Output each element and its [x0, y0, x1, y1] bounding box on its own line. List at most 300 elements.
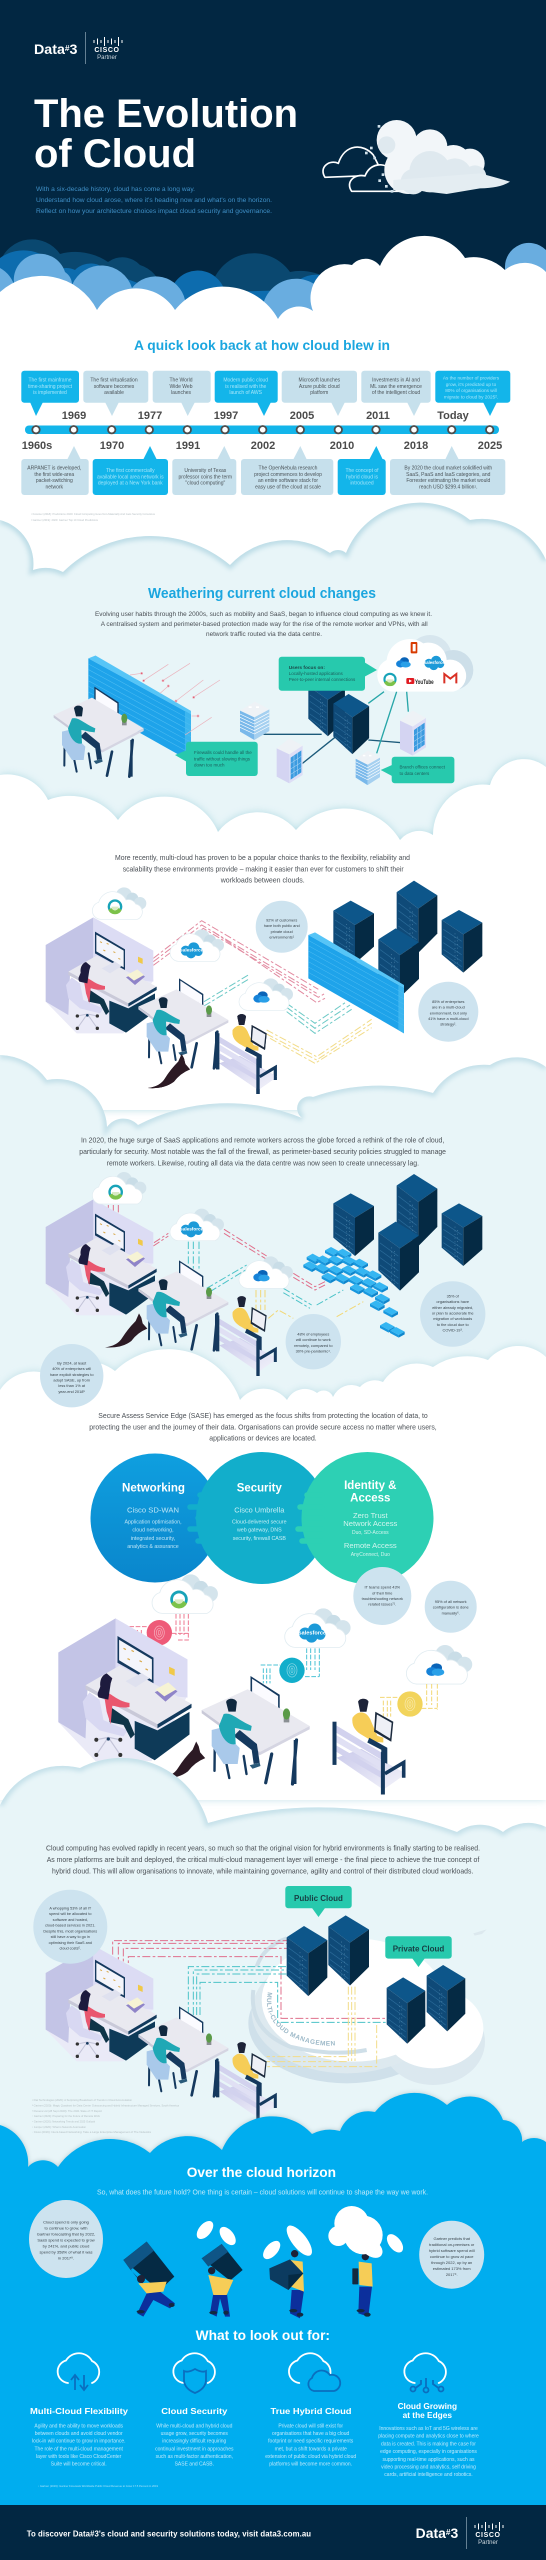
timeline year labels: 2025 — [478, 440, 502, 452]
cloud and fingerprint: onedrive — [380, 1645, 472, 1717]
callout: 1969: ARPANET is developed, — [27, 466, 81, 472]
stat: 35 percent: either already migrated, — [432, 1305, 473, 1310]
woman at cubicle — [46, 917, 157, 1033]
panel: light cloud section 1 — [0, 503, 546, 860]
callout: 1970 — [83, 371, 148, 416]
title: of Cloud — [34, 132, 196, 176]
timeline year labels: 1960s — [22, 440, 52, 452]
feature: multi-cloud flexibility: Suite will become critical. — [51, 2462, 107, 2468]
text block: hybrid cloud: Cloud computing has evolved rapidly in recent years, so much so that the original vision for hybrid environments is finally starting to be realised. — [46, 1844, 480, 1853]
icon: cloud with second cloud — [289, 2353, 340, 2391]
callout: 2025: grow, it's predicted up to — [446, 382, 497, 387]
callout: 1960s — [21, 371, 79, 416]
figure 4 with laptop — [352, 2253, 373, 2317]
stat: 40 percent — [40, 1344, 103, 1407]
text block: SASE: Secure Assess Service Edge (SASE) has emerged as the focus shifts from protecting the location of data, to — [98, 1411, 428, 1420]
feet of figures — [137, 2303, 371, 2317]
feature: true hybrid cloud: platforms will become more common. — [269, 2462, 352, 2468]
callout: 1977: The first commercially — [106, 468, 155, 474]
footer logo: Data — [416, 2526, 445, 2541]
cloud and fingerprint: salesforce — [261, 1608, 351, 1683]
stat: 43 percent: troubleshooting network — [362, 1596, 403, 1601]
section footnotes: ² Gartner (2020): Magic Quadrant for Data Center Outsourcing and Hybrid Infrastructure Managed Services, South America — [32, 2104, 180, 2108]
callout: branch offices — [381, 757, 454, 783]
stat: 95 percent: manually⁶. — [442, 1610, 460, 1615]
feature: multi-cloud flexibility — [30, 2353, 128, 2468]
venn: SASE pillars — [90, 1452, 434, 1584]
man on bench — [216, 1014, 277, 1094]
section footnotes — [32, 2099, 180, 2134]
timeline year labels: 2010 — [330, 440, 354, 452]
feature: true hybrid cloud: extension of public cloud via hybrid cloud — [265, 2454, 356, 2460]
title: The Evolution — [34, 92, 298, 136]
woman at cubicle — [58, 1618, 191, 1761]
timeline year labels: 1977 — [138, 410, 162, 422]
stat: 53 percent — [33, 1890, 107, 1964]
stat: 35 percent: COVID-19³. — [443, 1328, 463, 1332]
feature: cloud security: While multi-cloud and hybrid cloud — [156, 2423, 233, 2429]
section footnotes: ⁴ Gartner (2020): Preparing for the Future of Remote Work — [32, 2114, 101, 2118]
woman at cubicle — [46, 1199, 157, 1315]
callout: users focus on: Users focus on: — [289, 665, 325, 671]
feature: cloud growing at the edges: data is created. This is making the case for — [381, 2441, 476, 2447]
heading: what to look out for: What to look out for: — [196, 2328, 330, 2343]
text block: weathering intro: network traffic routed via the data centre. — [206, 631, 322, 638]
timeline year labels: Today — [437, 410, 470, 422]
callout: 2018: of the intelligent cloud — [372, 390, 420, 396]
dog — [105, 1313, 147, 1348]
callout: 1991 — [153, 371, 211, 416]
text block: 2020 — [79, 1136, 446, 1167]
callout: firewalls: down too much — [194, 763, 225, 768]
callout: 1969 — [21, 446, 89, 495]
feature: cloud growing at the edges: video processing and analytics, self driving — [381, 2464, 476, 2470]
callout: 1960s: time-sharing project — [28, 384, 73, 390]
stat: software spend: traditional on-premises or — [429, 2242, 475, 2247]
timeline year labels: 2005 — [290, 410, 314, 422]
callout: 2005: The OpenNebula research — [259, 466, 318, 472]
section footnotes: ³ Flexera Ltd (28 Sept 2020): The 2021 State of IT Report — [32, 2110, 102, 2113]
management cloud platform — [248, 1929, 487, 2085]
intro text: With a six-decade history, cloud has come a long way. — [36, 186, 195, 193]
icon: cloud with shield — [173, 2353, 215, 2393]
callout: 2010: Azure public cloud — [299, 384, 340, 390]
logo: Data#3 and Cisco Partner: # — [65, 44, 70, 53]
feature: cloud security — [155, 2353, 234, 2468]
circle: Identity and Access: AnyConnect, Duo — [351, 1552, 390, 1558]
figure 1 carrying rack — [123, 2242, 175, 2317]
man on bench — [216, 2042, 277, 2122]
feature: cloud growing at the edges — [378, 2353, 479, 2478]
callout: Public Cloud — [285, 1886, 352, 1917]
callout: 2011: The concept of — [345, 468, 379, 474]
firewall wall — [88, 656, 191, 762]
feature: cloud security: usage grow, security becomes — [161, 2431, 228, 2437]
header cloud band — [0, 236, 546, 322]
cloud: salesforce — [170, 929, 224, 961]
callout: 1960s: is implemented — [33, 390, 67, 396]
callout: 2005: easy use of the cloud at scale — [255, 484, 321, 490]
logo: Data#3 and Cisco Partner: CISCO — [94, 47, 120, 54]
stat: 53 percent: Despite this, most organisations — [43, 1929, 97, 1933]
small clouds carried — [194, 2206, 406, 2262]
callout: 1970: The first virtualisation — [90, 378, 138, 384]
server racks — [308, 677, 345, 736]
callout: 2011: introduced — [350, 481, 374, 487]
callout: Today: By 2020 the cloud market solidified with — [404, 466, 492, 472]
firewall — [308, 932, 404, 1033]
panel: blue horizon section — [0, 2093, 546, 2505]
text block: 2020: In 2020, the huge surge of SaaS applications and remote workers across the globe forced a rethink of the role of cloud, — [81, 1136, 444, 1145]
circle: Security: web gateway, DNS — [237, 1528, 282, 1534]
timeline year labels: 1970 — [100, 440, 124, 452]
text block: multi-cloud — [115, 853, 410, 885]
callout: 1960s: The first mainframe — [28, 378, 72, 384]
stat: 35 percent: migration of workloads — [433, 1316, 472, 1321]
timeline year labels: 2011 — [366, 410, 390, 422]
network lines — [263, 734, 402, 764]
callout: firewalls: Firewalls could handle all the — [194, 750, 252, 755]
circle: Identity and Access — [298, 1452, 434, 1584]
callout: 1991: The World — [170, 378, 193, 384]
circle: Identity and Access: Zero Trust — [353, 1511, 388, 1520]
callout: 1997: professor coins the term — [178, 474, 232, 480]
callout: users focus on: Peer-to-peer internal connections — [289, 677, 356, 682]
illustration: SASE era broken firewall — [46, 1172, 482, 1376]
feature: cloud growing at the edges: Innovations such as IoT and 5G wireless are — [379, 2426, 478, 2432]
worker at desk — [54, 687, 144, 777]
feature: true hybrid cloud — [265, 2353, 356, 2468]
callout: branch offices: Branch offices connect — [400, 764, 446, 770]
footer logo: 3 — [450, 2526, 459, 2541]
dog — [148, 1054, 190, 1088]
stat: 35 percent: organisations have — [436, 1299, 469, 1304]
logo: Data#3 and Cisco Partner: 3 — [70, 42, 78, 57]
callout: 1991: launches — [171, 390, 192, 396]
callout: 1977 — [93, 446, 168, 495]
callout: 1997 — [172, 446, 236, 495]
text block: 2020: remote workers. Likewise, routing all data via the data centre was now seen to create unnecessary lag. — [107, 1158, 419, 1167]
callout: Today: Forrester estimating the market would — [406, 478, 490, 484]
timeline year labels: 1997 — [214, 410, 238, 422]
callout: branch offices: to data centers — [400, 771, 430, 776]
stat: cloud spend — [29, 2200, 103, 2278]
callout: Today: reach USD $299.4 billion¹. — [419, 484, 477, 490]
panel: light cloud section 3 — [0, 1055, 546, 1420]
feature: cloud growing at the edges: placing compute and analytics close to where — [378, 2434, 479, 2440]
timeline year labels — [22, 410, 502, 452]
feature: true hybrid cloud: True Hybrid Cloud — [270, 2406, 352, 2416]
feature: multi-cloud flexibility: Multi-Cloud Flexibility — [30, 2406, 128, 2416]
callout: 1977: deployed at a New York bank — [98, 481, 163, 487]
man at desk — [138, 978, 228, 1068]
callout: 2002: launch of AWS — [229, 390, 263, 396]
stat: 48 percent — [286, 1314, 341, 1369]
timeline year labels: 2018 — [404, 440, 428, 452]
feature: cloud security: Cloud Security — [161, 2406, 228, 2416]
stat: 92 percent — [256, 901, 308, 953]
footer logo: # — [446, 2528, 451, 2537]
text block: multi-cloud: More recently, multi-cloud has proven to be a popular choice thanks to the flexibility, reliability and — [115, 853, 410, 862]
stat: 43 percent: related issues⁷¹. — [368, 1602, 396, 1607]
stat: 85 percent: strategy². — [440, 1022, 456, 1027]
stat: cloud spend: SaaS spend is expected to grow — [37, 2238, 95, 2242]
section footnotes: ⁶ Juniper (2020): What is Network Automation — [32, 2125, 87, 2129]
call to action: To discover Data#3's cloud and security solutions today, visit data3.com.au — [27, 2530, 311, 2539]
circle: Security: Cloud-delivered secure — [232, 1520, 287, 1526]
footer logo: CISCO — [475, 2532, 501, 2539]
stat: 40 percent: adopt SASE, up from — [53, 1378, 90, 1382]
intro text: Reflect on how your architecture choices impact cloud security and governance. — [36, 208, 272, 215]
callout: 2010: Microsoft launches — [298, 378, 341, 384]
feature: cloud growing at the edges: cards, artificial intelligence and robotics. — [384, 2472, 473, 2478]
callout: 2005 — [241, 446, 333, 495]
stat: 40 percent: have explicit strategies to — [50, 1372, 94, 1377]
footer logo: Partner — [478, 2540, 498, 2546]
callout: 2018: ML saw the emergence — [370, 384, 422, 390]
feature: true hybrid cloud: met, but a shift towards a private — [275, 2446, 347, 2452]
callout: 2002: Modern public cloud — [223, 378, 268, 384]
stat: 48 percent: 30% pre-pandemic⁴. — [296, 1348, 331, 1354]
cloud and fingerprint: webex — [129, 1574, 218, 1653]
callout: firewalls: traffic without slowing things — [194, 756, 251, 761]
callout: 1997: University of Texas — [184, 468, 227, 474]
callout: 2002: is realised with the — [225, 384, 266, 390]
cloud: webex — [92, 1172, 146, 1204]
section footnotes: ⁵ Gartner (2020): Networking Trends and 2025 Outlook — [32, 2120, 96, 2124]
callout: 2025: As the number of providers — [443, 376, 500, 380]
figure 2 carrying rack — [202, 2244, 243, 2317]
stat: 85 percent: are in a multi-cloud — [432, 1005, 465, 1010]
timeline footnotes: ² Gartner (2019): 2020: Gartner Top 10 Cloud Predictions — [31, 519, 99, 522]
stat: 48 percent: remotely, compared to — [294, 1343, 333, 1348]
callout: 1969: network — [46, 484, 64, 490]
text block: hybrid cloud: hybrid cloud. This will allow organisations to innovate, while maintaining governance, agility and control of their distributed cloud workloads. — [52, 1866, 473, 1875]
callout: Today — [390, 446, 505, 495]
callout: 1970: available — [104, 390, 124, 396]
text block: weathering intro — [95, 611, 432, 638]
circle: Identity and Access: Remote Access — [344, 1541, 397, 1550]
circle: Security: Cisco Umbrella — [234, 1506, 285, 1515]
text: horizon intro: So, what does the future hold? One thing is certain – cloud solutions will continue to shape the way we work. — [97, 2188, 428, 2197]
stat: 48 percent: will continue to work — [296, 1337, 331, 1342]
panel: white cloud section 2 — [0, 759, 546, 1110]
stat: 43 percent — [353, 1567, 411, 1625]
icon: outlined and fluffy cloud — [323, 120, 510, 194]
stat: 53 percent: software and hosted, — [53, 1918, 88, 1922]
callout: Private Cloud — [385, 1936, 452, 1967]
man at desk — [202, 1676, 310, 1784]
woman at cubicle — [46, 1945, 157, 2061]
illustration: people carrying servers and clouds — [123, 2206, 406, 2318]
bench and desk feet overlapping section 3 edge — [148, 1014, 277, 1094]
callout: Today: SaaS, PaaS and IaaS categories, and — [406, 472, 491, 478]
feature: multi-cloud flexibility: lock-in will continue to grow in importance. — [32, 2439, 126, 2445]
server racks — [333, 881, 482, 997]
callout: users focus on — [279, 657, 377, 691]
timeline footnotes — [31, 513, 156, 522]
stat: 53 percent: A whopping 53% of all IT — [49, 1906, 92, 1910]
feature: cloud security: continual investment in approaches — [155, 2446, 234, 2452]
data paths — [153, 921, 372, 1063]
panel: light cloud section 5 — [0, 1758, 546, 2200]
stat: 95 percent — [425, 1581, 477, 1633]
feature: multi-cloud flexibility: layer with tools like Cisco CloudCenter — [36, 2454, 122, 2460]
section footnotes: ¹ Flat Technologies (2020): A Surprising Breakdown of Trends in Cloud Accumulation — [32, 2099, 133, 2102]
timeline year labels: 1991 — [176, 440, 200, 452]
callout: 1977: available local area network is — [97, 474, 164, 480]
feature: multi-cloud flexibility: between clouds and avoid cloud vendor — [35, 2431, 123, 2437]
stat: cloud spend: in 2017⁸. — [58, 2256, 74, 2260]
circle: Identity and Access: Identity & — [344, 1480, 396, 1492]
stat: 85 percent — [418, 982, 478, 1042]
intro text — [36, 186, 272, 215]
circle: Identity and Access: Access — [350, 1493, 390, 1505]
stat: software spend: hybrid software spend will — [429, 2248, 475, 2253]
timeline footnotes: ¹ Forester (2018): Predictions 2020: Cloud Computing Goes Non-Materially And Gets Security Conscious — [31, 513, 156, 516]
man on bench — [332, 1699, 406, 1794]
server racks — [287, 1915, 465, 2044]
stat: 85 percent: 85% of enterprises — [432, 999, 465, 1004]
illustration: multi-cloud management — [27, 1915, 527, 2162]
feature: cloud growing at the edges: supporting real-time applications, such as — [382, 2457, 475, 2463]
callout: users focus on: Locally-hosted applications — [289, 671, 343, 676]
callout: 1997: "cloud computing" — [185, 481, 226, 487]
circle: Security: security, firewall CASB — [233, 1536, 286, 1542]
circle: Identity and Access: Duo, SD-Access — [352, 1530, 389, 1536]
stat: 95 percent: configuration is done — [433, 1605, 469, 1610]
feature: true hybrid cloud: footprint or need specific requirements — [268, 2439, 354, 2445]
callout: 2011: hybrid cloud is — [346, 474, 378, 480]
callout: 1969: packet-switching — [36, 478, 73, 484]
man on bench — [216, 1296, 277, 1376]
callout: 2025: 80% of organisations will — [445, 388, 497, 393]
text block: multi-cloud: scalability these environments provide – making it easier than ever for customers to shift their — [123, 864, 404, 874]
illustration: multi-cloud workers — [46, 881, 482, 1094]
callout: Private Cloud: Private Cloud — [393, 1944, 444, 1954]
figure 3 carrying rack — [269, 2250, 304, 2318]
circle: Security: Security — [237, 1483, 282, 1495]
stat: 53 percent: still have a way to go in — [51, 1935, 90, 1939]
callout: Public Cloud: Public Cloud — [294, 1894, 343, 1903]
timeline year labels: 2002 — [251, 440, 275, 452]
callout: 1991: Wide Web — [170, 384, 193, 390]
title — [34, 92, 298, 176]
circle: Networking: Networking — [122, 1483, 185, 1495]
stat: 40 percent: By 2024, at least — [57, 1360, 87, 1366]
feature: cloud security: SASE and CASB. — [175, 2462, 214, 2468]
stat: 35 percent: 35% of — [447, 1294, 460, 1298]
stat: 85 percent: environment, but only — [430, 1010, 467, 1015]
callout: 1969: the first wide-area — [34, 472, 74, 478]
stat: software spend — [419, 2221, 484, 2289]
data paths and infrastructure — [108, 1174, 482, 1338]
text block: weathering intro: Evolving user habits through the 2000s, such as mobility and SaaS, began to influence cloud computing as we knew it. — [95, 611, 432, 618]
heading: Over the cloud horizon: Over the cloud horizon — [187, 2164, 336, 2180]
text block: SASE: applications or devices are located. — [209, 1434, 317, 1443]
stat: 43 percent: of their time — [372, 1590, 392, 1595]
workers — [46, 1199, 277, 1376]
circle: Networking: Cisco SD-WAN — [127, 1506, 179, 1515]
callout: 2025 — [435, 371, 510, 416]
stat: software spend: through 2022, up by an — [431, 2260, 472, 2265]
man at desk — [138, 1260, 228, 1350]
stat: cloud spend: spend by 358% of what it was — [40, 2250, 92, 2254]
server racks — [333, 1174, 482, 1291]
feature: cloud growing at the edges: at the Edges — [403, 2410, 452, 2420]
dog — [159, 1742, 205, 1778]
stat: cloud spend: Cloud spend is only going — [43, 2220, 89, 2224]
stat: software spend: estimated 173% from — [433, 2266, 471, 2271]
label: multi-cloud management: MULTI-CLOUD MANAGEMENT — [266, 1992, 335, 2046]
stat: 85 percent: 41% have a multi-cloud — [428, 1016, 469, 1021]
attack arrows — [130, 663, 220, 735]
stat: 40 percent: 40% of enterprises will — [52, 1366, 91, 1371]
stat: 40 percent: year-end 2018⁵ — [58, 1389, 85, 1394]
stat: software spend: 2017⁹. — [446, 2272, 458, 2277]
text block: 2020: particularly for security. Most notable was the fall of the firewall, as perimeter-based security policies struggled to manage — [79, 1147, 446, 1156]
circle: Security — [190, 1452, 328, 1584]
text block: weathering intro: A centralised system and perimeter-based protection made way for the rise of the remote worker and VPNs, with all — [101, 621, 428, 628]
feature: cloud growing at the edges: edge computing, especially in organisations — [380, 2449, 477, 2455]
circle: Networking: integrated security, — [131, 1536, 175, 1542]
broken firewall bricks — [303, 1247, 405, 1338]
data paths — [108, 1205, 363, 1318]
stat: 53 percent: cloud-based services in 2021. — [45, 1924, 95, 1928]
stat: cloud spend: by 241%, and public cloud — [43, 2244, 89, 2248]
footer logo — [416, 2517, 503, 2549]
callout: 2002 — [215, 371, 278, 416]
logo: Data#3 and Cisco Partner — [34, 32, 122, 64]
stat: 48 percent: 48% of employees — [297, 1332, 329, 1336]
feature: multi-cloud flexibility: The role of the multi-cloud management — [35, 2446, 123, 2452]
stat: 35 percent: to the cloud due to — [437, 1322, 469, 1327]
feature: cloud growing at the edges: Cloud Growing — [398, 2401, 457, 2411]
man at desk — [138, 2006, 228, 2096]
stat: 95 percent: 95% of all network — [435, 1599, 467, 1604]
app clouds — [92, 1172, 293, 1288]
stat: 92 percent: have both public and — [264, 923, 300, 928]
illustration: firewall and data centre — [54, 635, 473, 785]
callout: 2010: platform — [310, 390, 328, 396]
office buildings — [240, 702, 269, 740]
cloud: salesforce — [170, 1209, 224, 1241]
feature: true hybrid cloud: Private cloud will still exist for — [278, 2423, 343, 2429]
logo: Data#3 and Cisco Partner: Partner — [97, 55, 117, 61]
timeline bar — [25, 426, 499, 434]
text block: SASE — [89, 1411, 437, 1443]
text block: multi-cloud: workloads between clouds. — [220, 876, 305, 885]
callout: 2018 — [361, 371, 431, 416]
stat: 40 percent: less than 1% at — [58, 1383, 86, 1388]
stat: 53 percent: cloud costs⁵. — [59, 1946, 81, 1950]
heading: quick look back: A quick look back at how cloud blew in — [134, 337, 390, 353]
panel: footer — [0, 2505, 546, 2560]
panel: white cloud section 4 — [0, 1346, 546, 1800]
feature: multi-cloud flexibility: Agility and the ability to move workloads — [34, 2423, 124, 2429]
text block: hybrid cloud — [46, 1844, 480, 1875]
illustration: zero trust workers — [58, 1574, 472, 1794]
circle: Networking — [90, 1454, 220, 1582]
data paths — [113, 1941, 387, 2067]
panel: header — [0, 0, 546, 322]
callout: 2025: migrate to cloud by 2025². — [444, 394, 498, 400]
timeline year labels: 1969 — [62, 410, 86, 422]
circle: Networking: Application optimisation, — [124, 1520, 182, 1526]
callout: 2018: Investments in AI and — [372, 378, 420, 384]
cloud: onedrive — [239, 978, 293, 1010]
callout: 2005: an entire software stack for — [258, 478, 318, 484]
